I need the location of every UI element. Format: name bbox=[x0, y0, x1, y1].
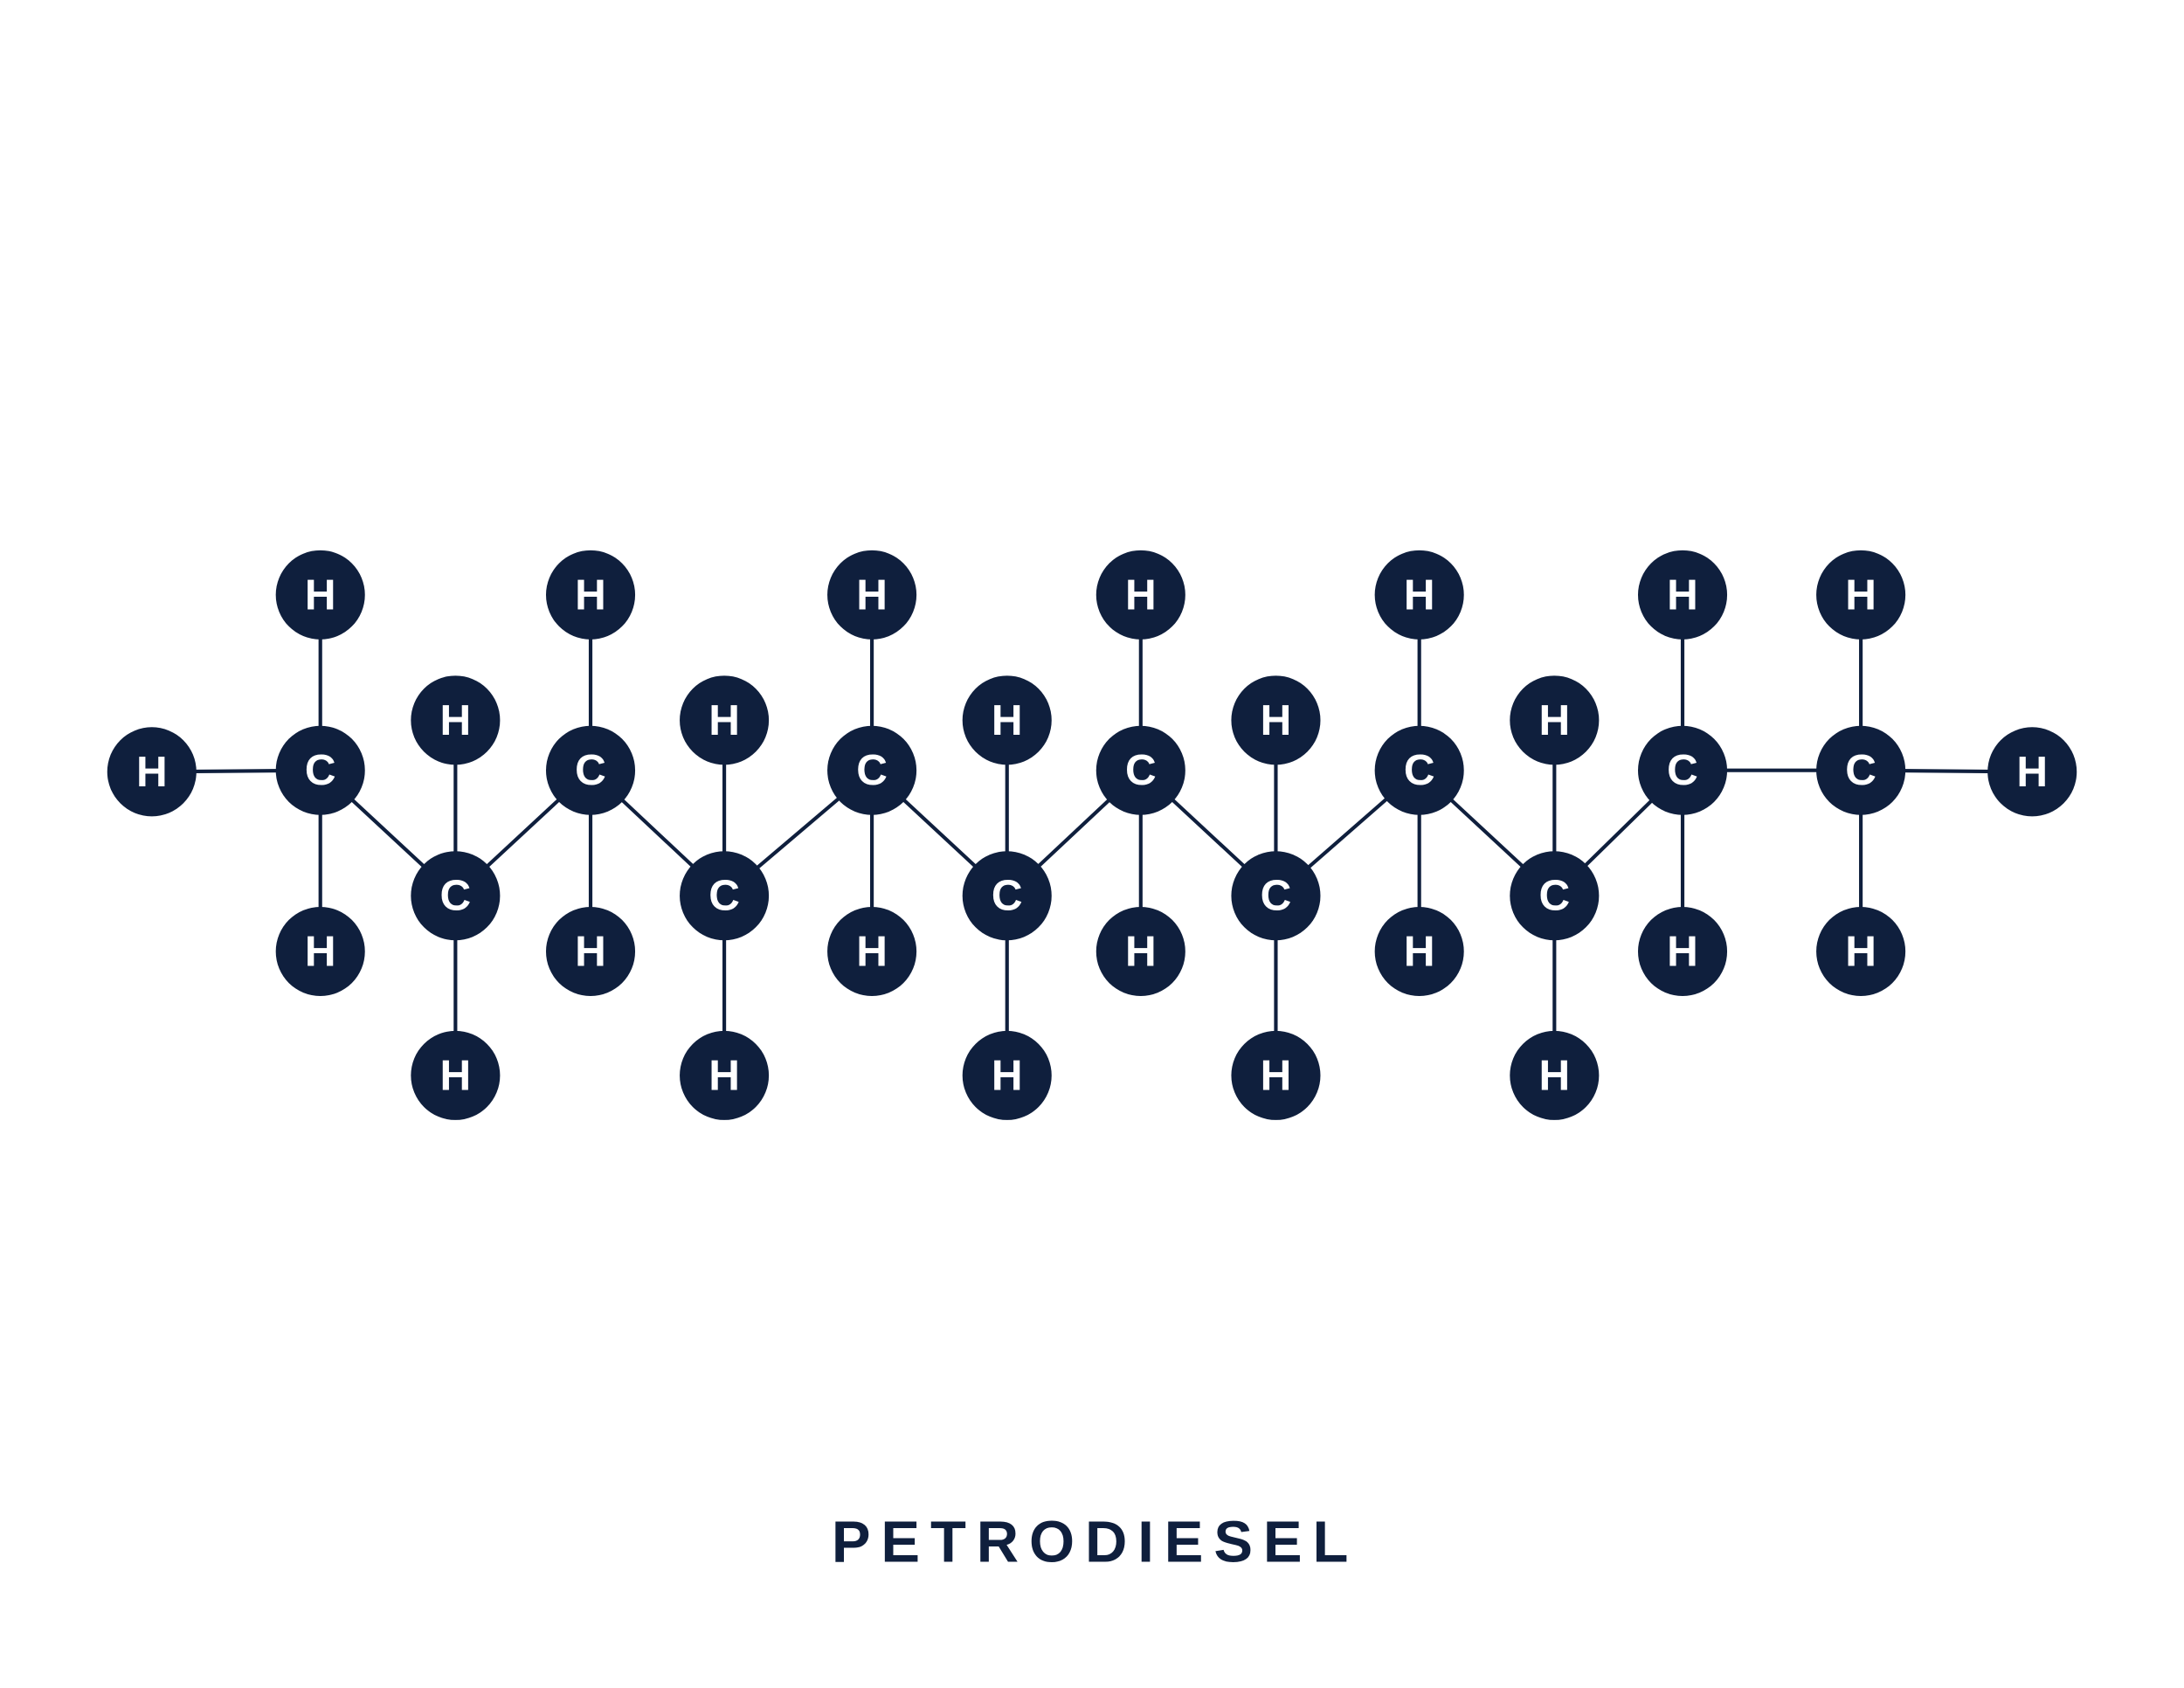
atoms: C bbox=[1538, 872, 1570, 920]
atoms: H bbox=[708, 696, 740, 744]
atoms: H bbox=[440, 696, 471, 744]
atoms: H bbox=[575, 928, 606, 976]
atoms: H bbox=[1538, 696, 1570, 744]
atoms: H bbox=[1261, 696, 1291, 744]
bonds bbox=[152, 595, 2032, 1076]
molecule: petrodiesel hydrocarbon chain bbox=[107, 550, 2077, 1120]
atoms: H bbox=[1845, 928, 1876, 976]
atoms: H bbox=[1667, 928, 1698, 976]
atoms: H bbox=[856, 928, 888, 976]
atoms: H bbox=[440, 1051, 471, 1099]
title: PETRODIESEL bbox=[832, 1509, 1348, 1574]
atoms: H bbox=[136, 748, 168, 796]
atoms: H bbox=[1125, 571, 1157, 619]
atoms: H bbox=[1845, 571, 1876, 619]
atoms: H bbox=[575, 571, 606, 619]
atoms: H bbox=[1125, 928, 1157, 976]
atoms: H bbox=[1404, 928, 1435, 976]
atoms: C bbox=[992, 872, 1023, 920]
atoms: H bbox=[1261, 1051, 1291, 1099]
atoms: H bbox=[1404, 571, 1435, 619]
atoms: C bbox=[1404, 746, 1435, 794]
atoms: H bbox=[305, 928, 336, 976]
atoms: C bbox=[1125, 746, 1157, 794]
atoms: H bbox=[2016, 748, 2048, 796]
atoms: C bbox=[1845, 746, 1876, 794]
atoms bbox=[107, 550, 2077, 1120]
atoms: C bbox=[856, 746, 888, 794]
atoms: H bbox=[992, 1051, 1023, 1099]
atoms: H bbox=[1667, 571, 1698, 619]
atoms: C bbox=[305, 746, 336, 794]
atoms: C bbox=[1667, 746, 1698, 794]
atoms: C bbox=[440, 872, 471, 920]
atoms: H bbox=[305, 571, 336, 619]
atoms: C bbox=[1261, 872, 1291, 920]
atoms: H bbox=[992, 696, 1023, 744]
atoms: H bbox=[708, 1051, 740, 1099]
atoms: H bbox=[1538, 1051, 1570, 1099]
atoms: C bbox=[708, 872, 740, 920]
atoms: C bbox=[575, 746, 606, 794]
atoms: H bbox=[856, 571, 888, 619]
